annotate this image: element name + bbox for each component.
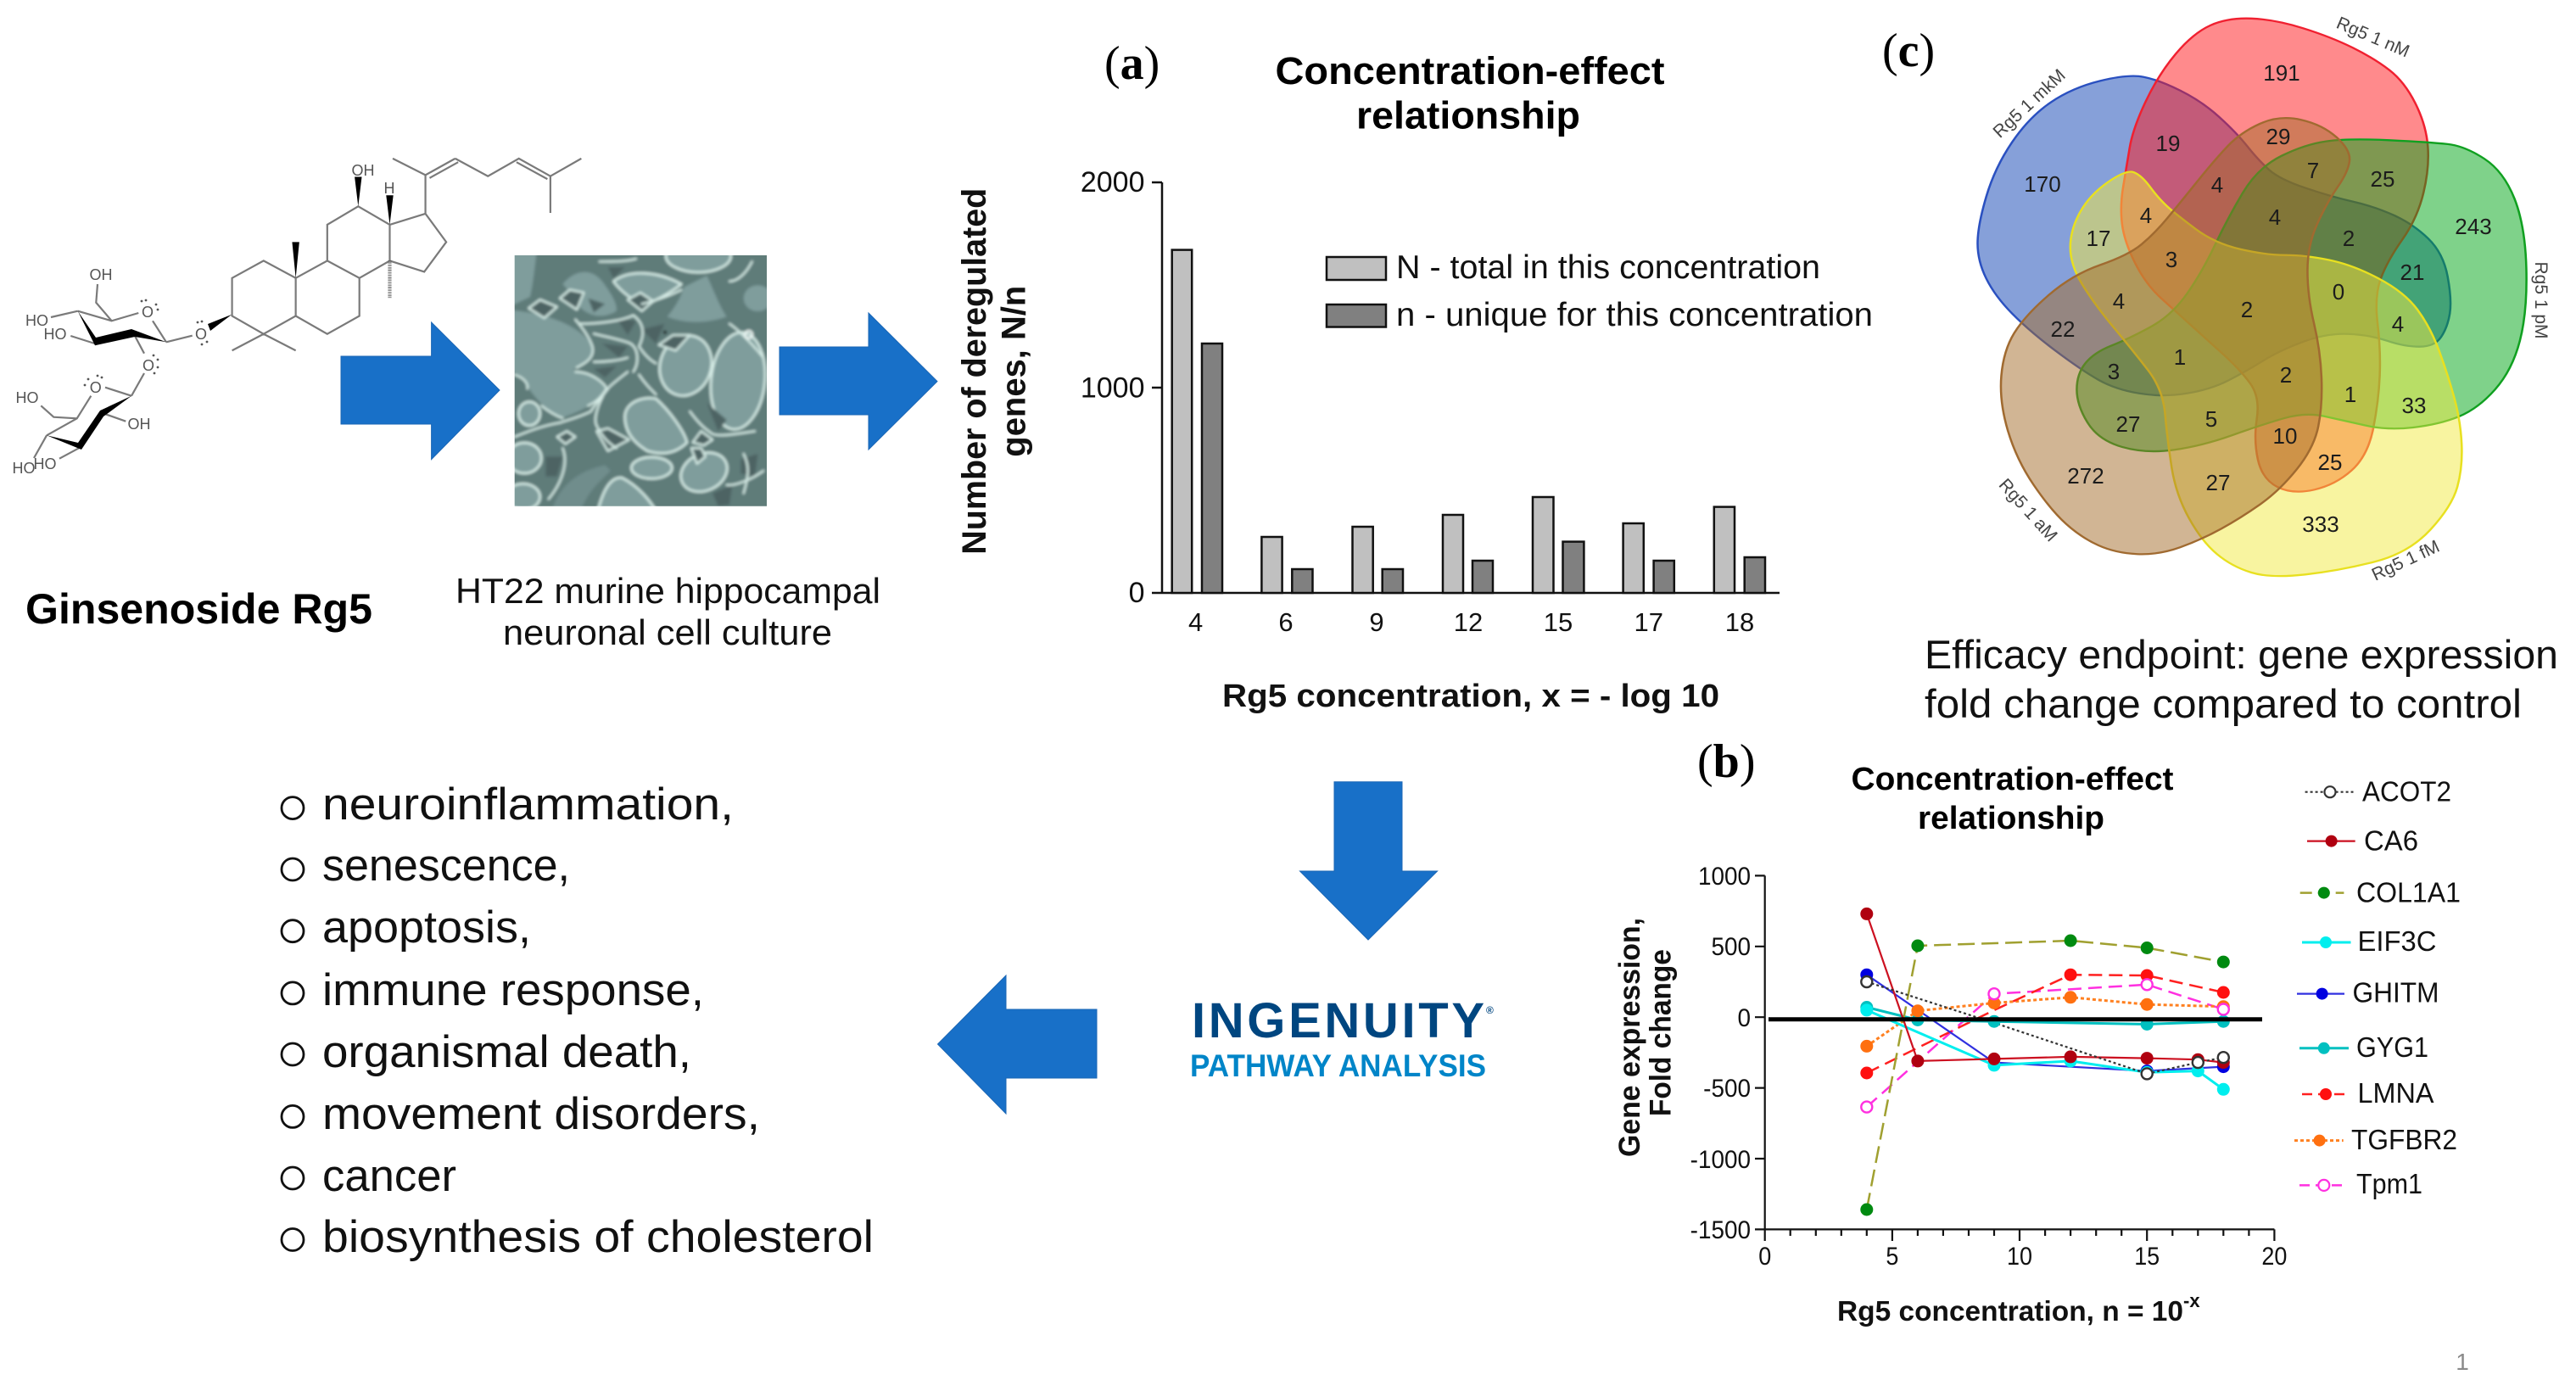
y axis ticks a: 2000 [1081, 166, 1145, 198]
venn counts: 4 [2113, 288, 2125, 314]
venn counts: 4 [2140, 203, 2152, 228]
x tick labels b: 15 [2134, 1243, 2160, 1271]
text block: efficacy endpoint: fold change compared to control [1925, 681, 2522, 726]
venn set labels: Rg5 1 fM [2369, 537, 2443, 585]
x axis title a: Rg5 concentration, x = - log 10 [1222, 679, 1719, 714]
legend: Tpm1 [2299, 1168, 2422, 1199]
list: affected biological processes: movement disorders, [322, 1089, 760, 1139]
venn counts: 29 [2266, 124, 2290, 149]
legend: GHITM [2297, 977, 2439, 1009]
legend: GYG1 [2299, 1031, 2428, 1063]
legend a [1327, 249, 1873, 333]
list: affected biological processes: biosynthesis of cholesterol [322, 1212, 874, 1262]
series: CA6 [1867, 914, 2223, 1063]
series: EIF3C [1867, 1010, 2223, 1089]
page number: 1 [2456, 1349, 2469, 1375]
y axis ticks a [1081, 166, 1145, 609]
y tick labels b: -500 [1703, 1075, 1751, 1103]
logo: Ingenuity Pathway Analysis: ® [1486, 1004, 1494, 1016]
venn counts: 5 [2205, 406, 2217, 432]
arrow: compound to cell culture [341, 322, 500, 460]
list bullets [282, 797, 304, 1250]
panel label a: (a) [1104, 37, 1159, 90]
venn counts: 25 [2371, 166, 2394, 192]
series: Tpm1 [1867, 985, 2223, 1107]
chemical structure: ginsenoside Rg5: O [90, 379, 102, 396]
chemical structure: ginsenoside Rg5: HO [44, 326, 66, 343]
venn counts: 21 [2400, 260, 2424, 285]
venn counts: 2 [2241, 297, 2253, 322]
list: affected biological processes: immune response, [322, 965, 704, 1015]
legend: CA6 [2307, 825, 2418, 857]
y tick labels b: -1500 [1690, 1216, 1751, 1244]
x axis tick labels a: 4 [1188, 607, 1203, 637]
logo: Ingenuity Pathway Analysis: INGENUITY [1192, 993, 1484, 1048]
axes b [1755, 875, 2274, 1241]
list: affected biological processes: neuroinflammation, [322, 780, 734, 830]
y tick labels b: 500 [1711, 933, 1751, 961]
y axis ticks a: 0 [1129, 577, 1145, 609]
legend a: N - total in this concentration [1396, 249, 1820, 286]
legend: EIF3C: EIF3C [2358, 925, 2436, 957]
text block: efficacy endpoint [1925, 632, 2558, 726]
legend: CA6: CA6 [2364, 825, 2418, 857]
series: COL1A1 [1867, 941, 2223, 1210]
legend: ACOT2: ACOT2 [2362, 775, 2451, 807]
list: affected biological processes: cancer [322, 1151, 456, 1201]
venn counts: 4 [2269, 204, 2281, 230]
chart title b: Concentration-effect [1851, 762, 2174, 797]
series: ACOT2 [1867, 982, 2223, 1074]
x axis tick labels a: 18 [1725, 607, 1754, 637]
chart title a: Concentration-effect [1276, 49, 1665, 92]
venn counts: 4 [2392, 311, 2404, 337]
venn set labels: Rg5 1 mkM [1989, 65, 2070, 142]
venn counts: 25 [2318, 450, 2342, 475]
caption: HT22 cell culture: HT22 murine hippocampal [455, 571, 880, 611]
list: affected biological processes: apoptosis, [322, 902, 531, 953]
panel label b: (b) [1697, 735, 1755, 788]
venn counts: 27 [2206, 470, 2230, 495]
y axis title a: genes, N/n [996, 286, 1033, 457]
chemical structure: ginsenoside Rg5: HO [34, 455, 56, 472]
chart title a [1276, 49, 1665, 137]
arrow: cell culture to chart [780, 313, 937, 450]
legend: COL1A1 [2300, 877, 2461, 908]
caption: HT22 cell culture [455, 571, 880, 652]
list: affected biological processes [282, 780, 874, 1262]
chemical structure: ginsenoside Rg5: O [142, 357, 154, 374]
legend: COL1A1: COL1A1 [2356, 877, 2461, 908]
venn set labels: Rg5 1 aM [1995, 475, 2061, 545]
bars a [1172, 250, 1765, 593]
caption: HT22 cell culture: neuronal cell culture [503, 612, 832, 652]
chemical structure: ginsenoside Rg5 [12, 159, 581, 477]
venn counts: 27 [2116, 411, 2140, 437]
venn counts: 3 [2165, 247, 2177, 272]
venn set labels: Rg5 1 nM [2333, 14, 2412, 61]
venn counts: 1 [2344, 382, 2356, 407]
arrow: pathway analysis to outcomes [938, 975, 1097, 1114]
venn counts: 243 [2455, 214, 2492, 239]
legend: EIF3C [2302, 925, 2436, 957]
x tick labels b: 0 [1758, 1243, 1771, 1271]
venn set labels: Rg5 1 pM [2531, 261, 2551, 339]
venn counts: 333 [2302, 511, 2339, 537]
venn counts: 3 [2108, 359, 2120, 384]
y tick labels b: -1000 [1690, 1146, 1751, 1174]
x axis tick labels a: 9 [1369, 607, 1384, 637]
venn counts: 0 [2333, 279, 2344, 305]
legend: ACOT2 [2305, 775, 2451, 807]
x axis title b: -x [2183, 1290, 2200, 1311]
series: GHITM [1867, 975, 2223, 1071]
legend b [2294, 775, 2461, 1199]
series: TGFBR2 [1867, 997, 2223, 1046]
y tick labels b: 0 [1737, 1004, 1751, 1032]
venn counts: 22 [2051, 316, 2075, 342]
panel (c): five-set Venn diagram [1882, 14, 2551, 585]
text block: efficacy endpoint: Efficacy endpoint: gene expression [1925, 632, 2558, 677]
panel label c: (c) [1882, 25, 1935, 77]
legend a: n - unique for this concentration [1396, 297, 1873, 333]
venn counts: 10 [2273, 423, 2297, 449]
y tick labels b: 1000 [1698, 863, 1751, 891]
venn counts: 2 [2343, 226, 2355, 251]
x tick labels b: 20 [2261, 1243, 2287, 1271]
y axis title b: Gene expression, [1613, 918, 1646, 1157]
venn counts [2024, 60, 2492, 537]
logo: Ingenuity Pathway Analysis [1190, 993, 1494, 1083]
chart title b [1851, 762, 2174, 836]
panel (b): gene expression line chart [1613, 735, 2461, 1327]
zero baseline [1769, 1017, 2262, 1021]
x axis tick labels a: 12 [1454, 607, 1483, 637]
chart title a: relationship [1356, 93, 1580, 137]
y axis title b [1613, 918, 1678, 1157]
chemical structure: ginsenoside Rg5: OH [90, 266, 112, 283]
photo: HT22 cell culture [514, 255, 767, 506]
x tick labels b [1758, 1243, 2287, 1271]
chemical structure: ginsenoside Rg5: HO [25, 312, 48, 329]
venn shapes [1978, 19, 2527, 576]
chemical structure: ginsenoside Rg5: HO [12, 460, 36, 477]
legend: GHITM: GHITM [2353, 977, 2439, 1009]
legend: Tpm1: Tpm1 [2356, 1168, 2422, 1199]
x axis title b: Rg5 concentration, n = 10 [1837, 1295, 2183, 1327]
venn counts: 191 [2263, 60, 2300, 86]
data markers [1860, 908, 2230, 1216]
panel (a): bar chart of deregulated genes [956, 37, 1873, 714]
venn counts: 1 [2174, 344, 2186, 370]
chemical structure: ginsenoside Rg5: O [142, 304, 154, 321]
chemical structure: ginsenoside Rg5: H [383, 180, 395, 197]
venn counts: 7 [2307, 158, 2319, 183]
series: LMNA [1867, 975, 2223, 1073]
venn set labels [1989, 14, 2551, 585]
x axis tick labels a: 6 [1278, 607, 1294, 637]
venn counts: 272 [2067, 463, 2104, 489]
legend: LMNA: LMNA [2358, 1077, 2434, 1109]
x axis tick labels a: 15 [1544, 607, 1573, 637]
logo: Ingenuity Pathway Analysis: PATHWAY ANALYSIS [1190, 1048, 1486, 1083]
list: affected biological processes: senescence, [322, 841, 570, 891]
venn counts: 19 [2156, 131, 2180, 156]
y axis title a: Number of deregulated [956, 188, 993, 555]
y axis title b: Fold change [1644, 949, 1678, 1116]
heading: Ginsenoside Rg5: Ginsenoside Rg5 [25, 585, 372, 633]
series: GYG1 [1867, 1008, 2223, 1025]
venn counts: 170 [2024, 171, 2061, 197]
x axis tick labels a [1188, 607, 1754, 637]
legend: GYG1: GYG1 [2356, 1031, 2428, 1063]
venn counts: 4 [2211, 172, 2223, 198]
legend: LMNA [2302, 1077, 2434, 1109]
sugar rings [34, 284, 232, 459]
x tick labels b: 10 [2007, 1243, 2032, 1271]
y axis title a [956, 188, 1033, 555]
x axis tick labels a: 17 [1634, 607, 1663, 637]
venn counts: 2 [2280, 362, 2292, 388]
venn counts: 17 [2087, 226, 2110, 251]
chemical structure: ginsenoside Rg5: HO [15, 389, 39, 406]
list: affected biological processes: organismal death, [322, 1027, 691, 1077]
chemical structure: ginsenoside Rg5: OH [127, 416, 151, 433]
venn counts: 33 [2402, 393, 2426, 418]
y axis ticks a: 1000 [1081, 372, 1145, 405]
chemical structure: ginsenoside Rg5: O [195, 326, 207, 343]
y tick labels b [1690, 863, 1751, 1244]
chemical structure: ginsenoside Rg5: OH [351, 162, 375, 179]
legend: TGFBR2 [2294, 1124, 2457, 1155]
legend: TGFBR2: TGFBR2 [2351, 1124, 2457, 1155]
chart title b: relationship [1918, 801, 2104, 836]
arrow: chart to pathway analysis [1299, 782, 1438, 940]
x tick labels b: 5 [1886, 1243, 1898, 1271]
